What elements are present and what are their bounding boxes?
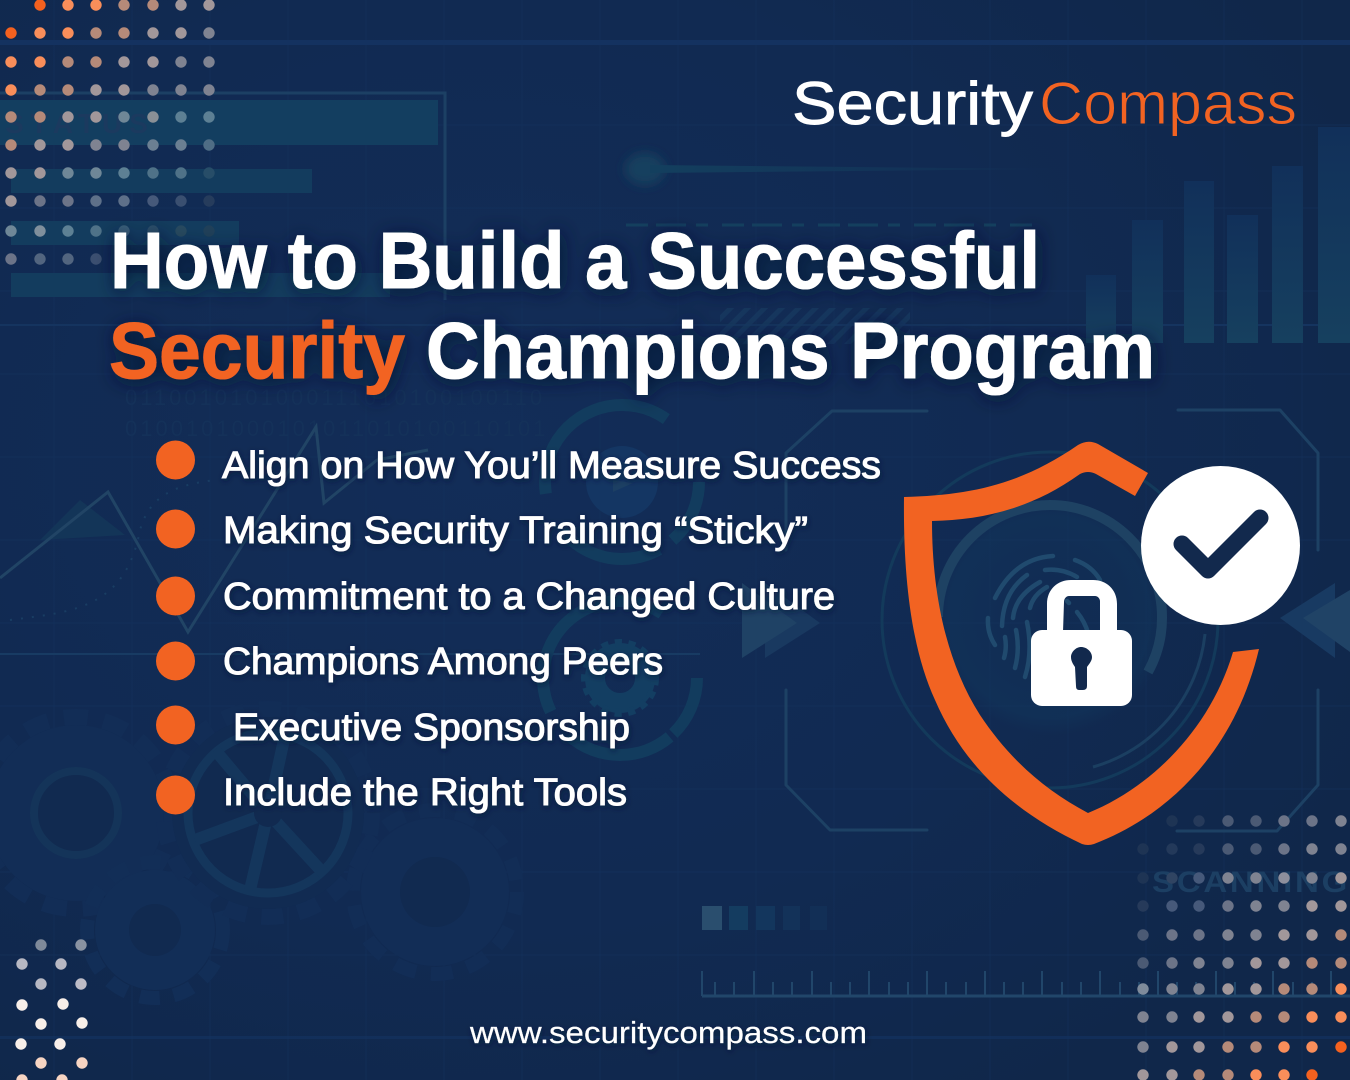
website url: www.securitycompass.com xyxy=(469,1015,867,1050)
icon: padlock xyxy=(1031,580,1132,706)
progress squares backdrop xyxy=(702,906,827,930)
ruler backdrop xyxy=(702,971,1350,996)
bullet markers xyxy=(156,440,195,814)
line chart backdrop xyxy=(0,427,428,632)
target icon backdrop xyxy=(545,405,699,559)
icon: shield xyxy=(904,442,1259,845)
binary text backdrop xyxy=(125,385,548,441)
dot grid: bottom right xyxy=(1137,815,1347,1080)
bullet labels: Include the Right Tools xyxy=(223,772,627,814)
logo: Security Compass: Security xyxy=(792,70,1033,137)
icon: fingerprint rings xyxy=(882,452,1218,788)
chart bars backdrop xyxy=(1086,127,1350,343)
circuit bracket backdrop xyxy=(786,410,1318,831)
status panel backdrop: STATUS xyxy=(5,108,155,139)
bullet list xyxy=(156,440,881,814)
bullet labels: Align on How You’ll Measure Success xyxy=(222,445,881,487)
dot cluster: bottom left xyxy=(15,939,88,1080)
bullet labels: Making Security Training “Sticky” xyxy=(223,510,808,552)
bullet labels: Commitment to a Changed Culture xyxy=(223,576,835,618)
binary text backdrop: 0100101000101011010100110101 xyxy=(125,416,548,441)
status panel backdrop xyxy=(0,93,445,300)
bullet labels: Champions Among Peers xyxy=(223,641,663,683)
logo: Security Compass: Compass xyxy=(1039,70,1297,137)
title xyxy=(109,216,1155,395)
right arrows backdrop xyxy=(1280,583,1350,658)
bullet labels: Executive Sponsorship xyxy=(233,707,630,749)
scanning label backdrop: SCANNING xyxy=(1152,866,1350,899)
comet line backdrop xyxy=(625,153,1058,225)
dot grid: top left xyxy=(5,0,215,265)
icon: check badge xyxy=(1141,466,1300,625)
hatched strip backdrop xyxy=(720,308,910,344)
binary text backdrop: 0110010101000111010100100110 xyxy=(125,385,545,410)
gear target icon backdrop xyxy=(543,601,697,755)
bullet labels xyxy=(222,445,881,814)
play arrows backdrop xyxy=(742,583,820,658)
logo: Security Compass xyxy=(792,70,1297,137)
title: How to Build a Successful xyxy=(110,216,1040,305)
gears backdrop xyxy=(0,709,517,998)
title: Champions Program xyxy=(426,306,1155,395)
title: Security xyxy=(109,306,405,395)
